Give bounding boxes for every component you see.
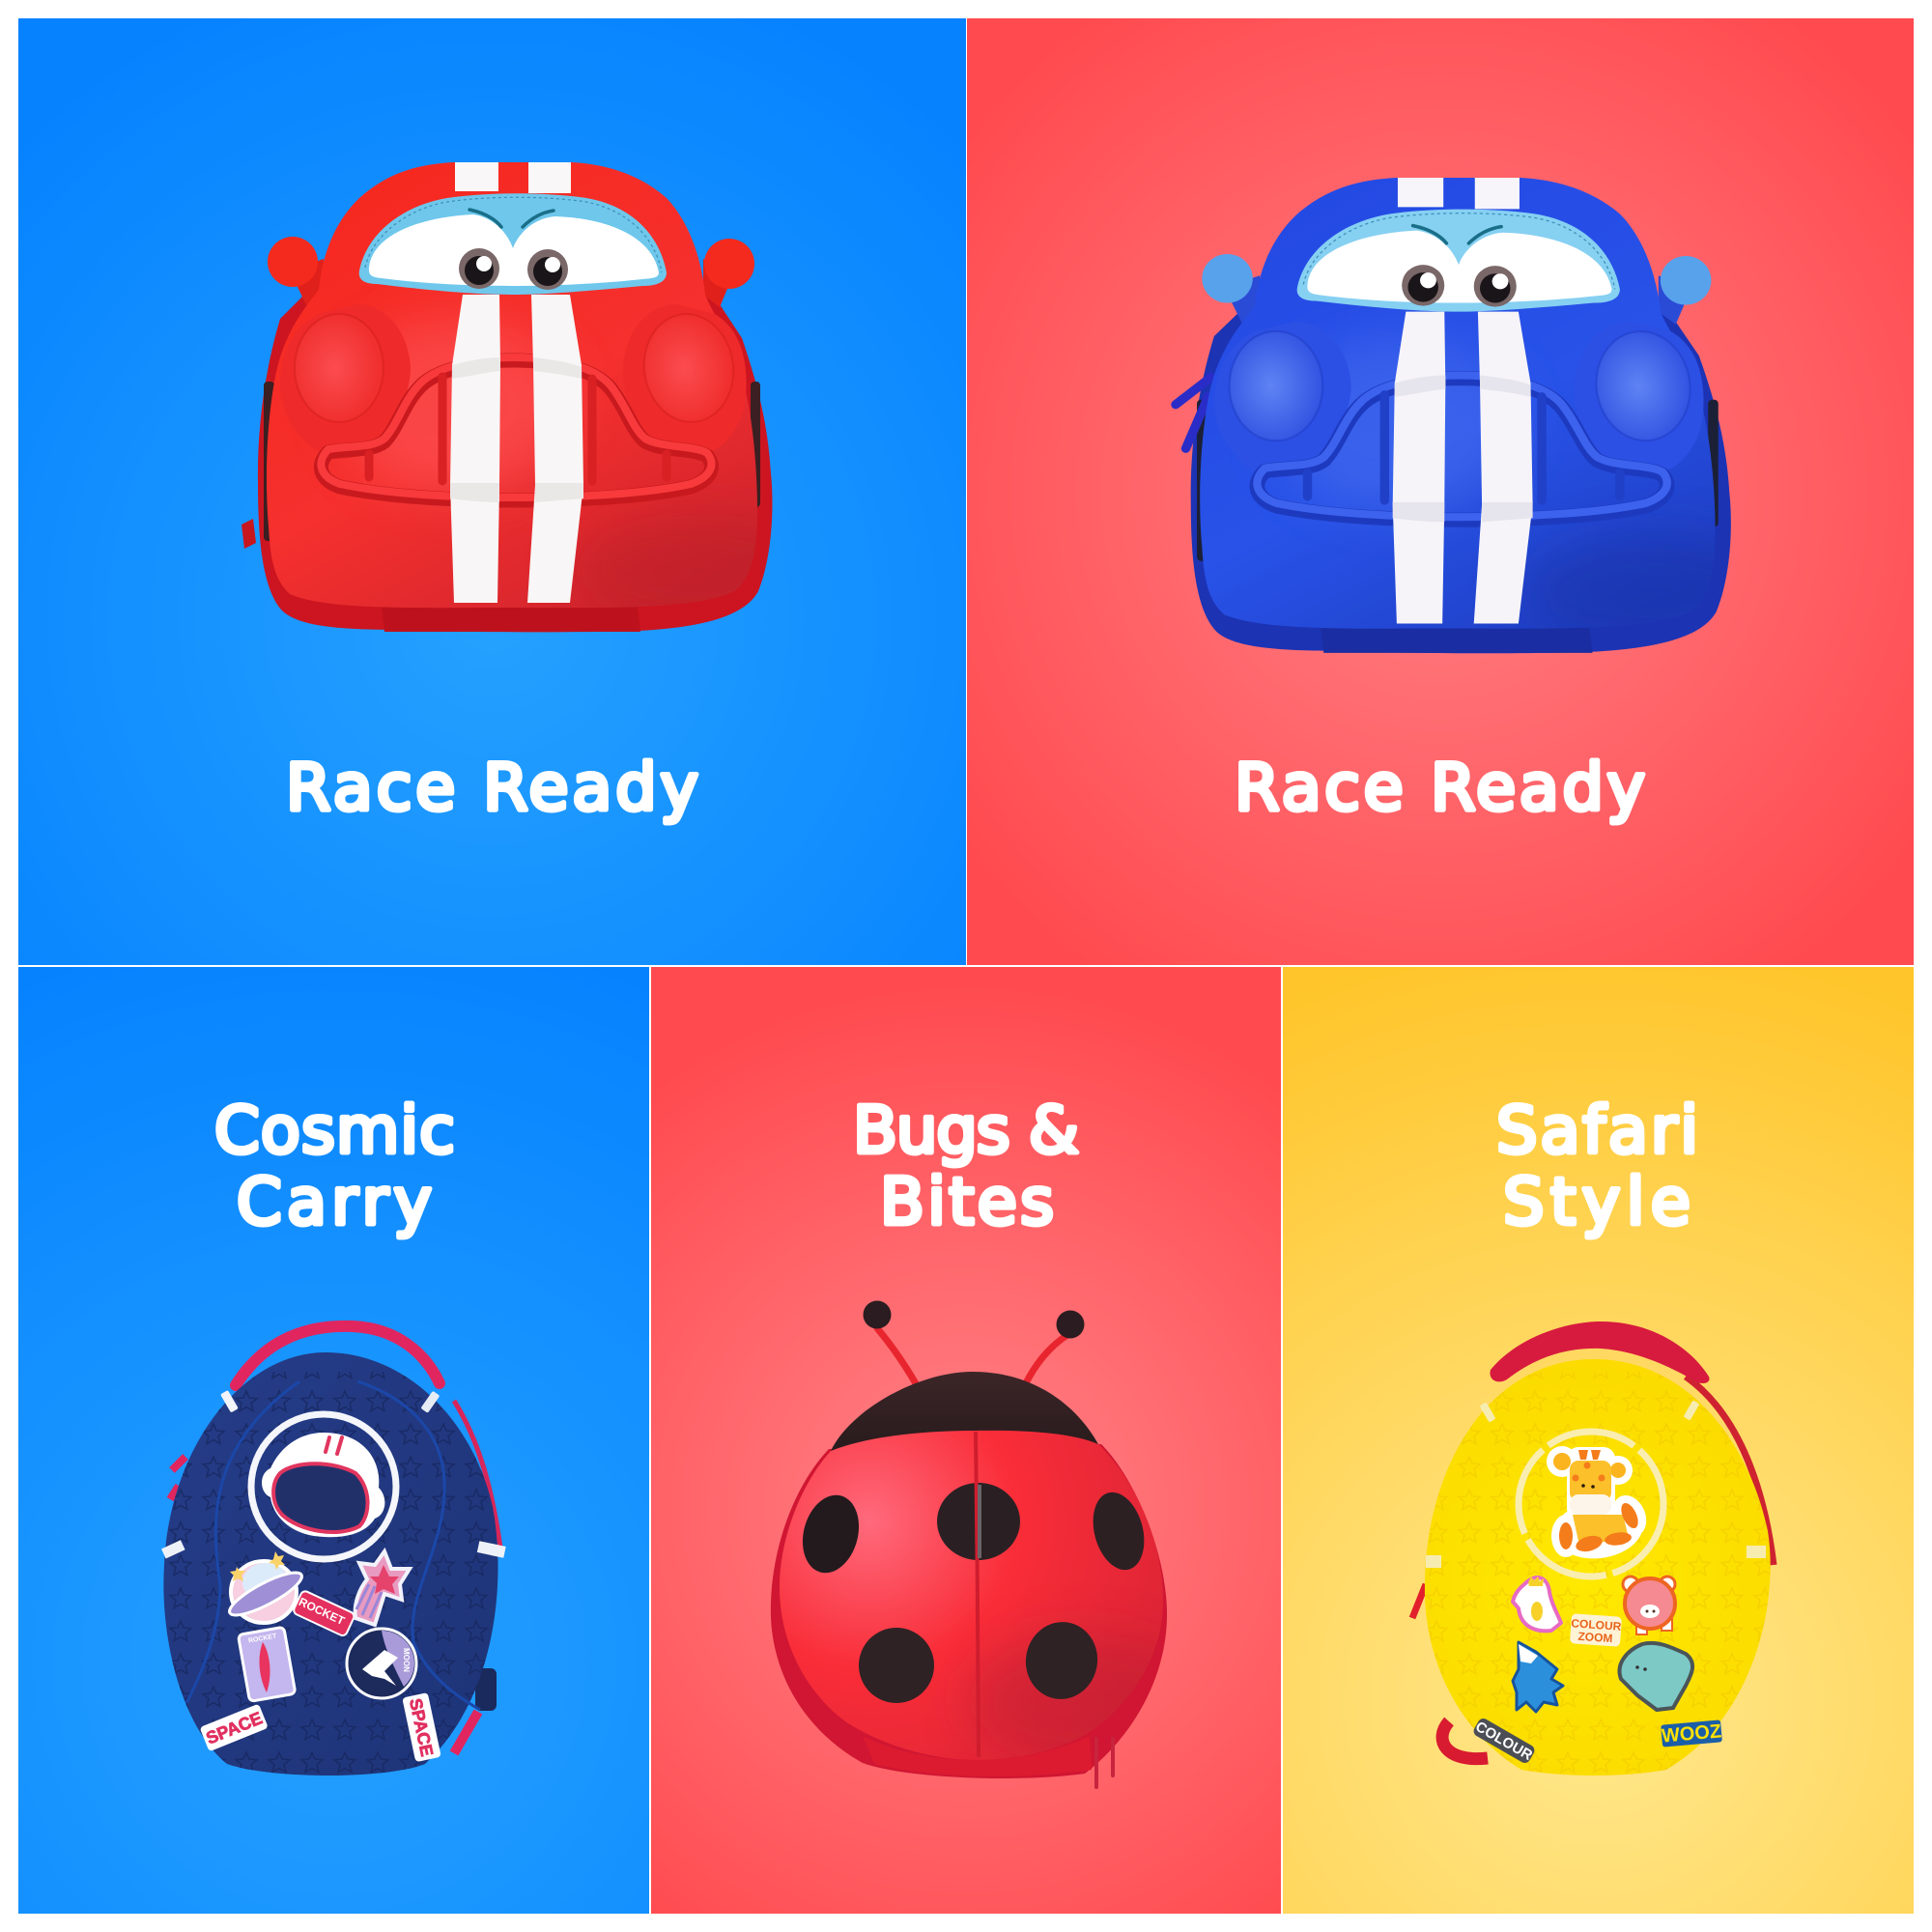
helmet: [262, 1433, 384, 1537]
heading: bugs and bites: Bites: [880, 1164, 1054, 1239]
sticker: space right: [402, 1692, 441, 1762]
zipper layer: [258, 290, 772, 632]
sticker: rocket label: [293, 1590, 355, 1637]
sticker: wooz: WOOZ: [1661, 1720, 1722, 1747]
heading: cosmic carry: [214, 1093, 455, 1239]
heading: safari style: [1496, 1093, 1698, 1239]
keyhole outline: [186, 1381, 480, 1710]
headlight left: [295, 314, 384, 422]
shell: [1200, 178, 1716, 629]
heading: race ready: Race Ready: [286, 750, 698, 825]
heading: cosmic carry: Cosmic: [214, 1093, 455, 1168]
panel background blue: [18, 967, 649, 1914]
backpack: astronaut: [161, 1326, 506, 1777]
panel: cosmic carry: [18, 967, 649, 1914]
sticker: colour: COLOUR: [1472, 1719, 1535, 1764]
helmet mark: [326, 1437, 342, 1454]
mirror right: [1659, 256, 1711, 325]
handle: [1490, 1321, 1710, 1383]
windshield: [359, 193, 667, 295]
panel background red: [651, 967, 1281, 1914]
side pocket left: [264, 382, 274, 541]
stitching: [1303, 213, 1615, 289]
clip right: [1747, 1546, 1766, 1558]
zipper layer: [1191, 307, 1731, 653]
sticker: hedgehog: [1513, 1642, 1563, 1712]
ring: [1519, 1432, 1663, 1577]
wing shell: [780, 1431, 1163, 1760]
panel background yellow: [1283, 967, 1914, 1914]
panel: race ready red car on blue: [18, 18, 966, 965]
spot lower left: [859, 1628, 934, 1703]
zipper pulls: [1096, 1739, 1113, 1787]
sticker: shooting star: [355, 1551, 410, 1625]
shell shading: [966, 1633, 1198, 1768]
side loops: [170, 1457, 185, 1499]
stitching: [365, 197, 662, 272]
sticker: colour zoom: ZOOM: [1577, 1630, 1613, 1645]
fenders: [1214, 322, 1704, 478]
fenders: [280, 304, 747, 459]
eye right: [1474, 266, 1517, 307]
hood stripes: [1393, 312, 1533, 623]
clip left: [1426, 1555, 1441, 1568]
sticker: rocket card: ROCKET: [248, 1633, 278, 1645]
clip right: [477, 1541, 506, 1558]
right edge zipper: [454, 1401, 501, 1555]
centre seam: [976, 1432, 980, 1757]
buckle: [475, 1668, 497, 1711]
heading: bugs and bites: Bugs &: [853, 1093, 1079, 1168]
antenna ball left: [864, 1300, 891, 1329]
eyebrows: [1413, 226, 1501, 243]
side pocket right: [751, 382, 760, 507]
sticker: colour zoom: COLOUR: [1571, 1616, 1622, 1634]
roof stripes: [1398, 178, 1520, 209]
hood stripes: [450, 295, 583, 603]
sticker: moon patch: MOON: [402, 1648, 411, 1672]
backpack: ladybug: [771, 1300, 1198, 1787]
clip top left: [220, 1390, 239, 1413]
clip top right: [420, 1391, 440, 1413]
sticker: rocket card: [238, 1627, 296, 1701]
heading: safari style: Safari: [1496, 1093, 1698, 1168]
mirror left: [1202, 254, 1260, 325]
sticker: space right: SPACE: [406, 1696, 437, 1758]
sticker: elephant: [1620, 1643, 1692, 1710]
embossed stars: [1420, 1372, 1773, 1777]
sticker: rocket label: ROCKET: [297, 1595, 348, 1628]
antennae: [877, 1328, 1067, 1387]
windshield: [1297, 210, 1620, 312]
bottom band: [1321, 628, 1593, 653]
side pocket right: [1708, 400, 1719, 526]
antenna ball right: [1057, 1310, 1084, 1339]
shell: [163, 1352, 498, 1776]
shell: [267, 162, 757, 608]
helmet ring: [251, 1414, 396, 1559]
clip top right: [1684, 1400, 1699, 1421]
head: [831, 1372, 1098, 1451]
shell: [1425, 1359, 1771, 1776]
sticker: colour zoom: [1570, 1613, 1622, 1647]
panel: safari style: [1283, 967, 1914, 1914]
visor: [273, 1463, 368, 1532]
shell highlights: [354, 309, 757, 607]
backpack: red car: [242, 162, 821, 632]
zipper pulls: [1176, 377, 1211, 448]
heading: cosmic carry: Carry: [237, 1164, 432, 1239]
zip pull left: [1412, 1584, 1426, 1618]
panel background red: [967, 18, 1914, 965]
sticker: giraffe: [1547, 1446, 1653, 1564]
headlight right: [1589, 326, 1697, 446]
clip top left: [1480, 1402, 1495, 1423]
sticker: space left: SPACE: [203, 1708, 265, 1748]
heading: safari style: Style: [1503, 1164, 1690, 1239]
heading: race ready: Race Ready: [1235, 750, 1645, 825]
zipper band: [1686, 1377, 1774, 1565]
eyebrows: [469, 210, 554, 227]
sticker: moon patch: [347, 1629, 416, 1698]
spot right: [1085, 1487, 1152, 1576]
sticker: pig: [1623, 1577, 1675, 1634]
roof stripes: [455, 162, 571, 193]
heading: bugs and bites: [853, 1093, 1079, 1239]
front lip: [863, 1736, 1092, 1776]
headlight left: [1230, 331, 1322, 440]
strap: [1442, 1721, 1488, 1759]
eye right: [527, 249, 568, 290]
sticker: planet: [225, 1551, 306, 1623]
backpack: giraffe: [1412, 1321, 1774, 1777]
grille: [321, 357, 712, 500]
panel background blue: [18, 18, 966, 965]
white eye panel: [369, 214, 659, 286]
underside: [771, 1444, 1167, 1778]
spot centre: [937, 1483, 1020, 1560]
sticker: chicken: [1513, 1577, 1561, 1631]
white eye panel: [1307, 231, 1611, 303]
spot lower right: [1020, 1616, 1103, 1705]
panel: bugs and bites: [651, 967, 1281, 1914]
bottom band: [382, 607, 640, 632]
grille: [1257, 375, 1667, 520]
mirror left: [268, 237, 324, 307]
lower right strap: [454, 1712, 478, 1753]
clip left: [161, 1540, 185, 1559]
headlight right: [638, 308, 740, 428]
embossed stars: [164, 1372, 502, 1777]
eye left: [459, 248, 499, 289]
pull tab: [242, 519, 256, 549]
mirror right: [703, 239, 754, 307]
panel: race ready blue car on red: [967, 18, 1914, 965]
spot left: [794, 1489, 867, 1579]
eye left: [1402, 265, 1444, 306]
backpack: blue car: [1176, 178, 1782, 653]
side pocket left: [1197, 400, 1208, 561]
handle: [236, 1326, 440, 1385]
shell highlights: [1300, 336, 1716, 628]
